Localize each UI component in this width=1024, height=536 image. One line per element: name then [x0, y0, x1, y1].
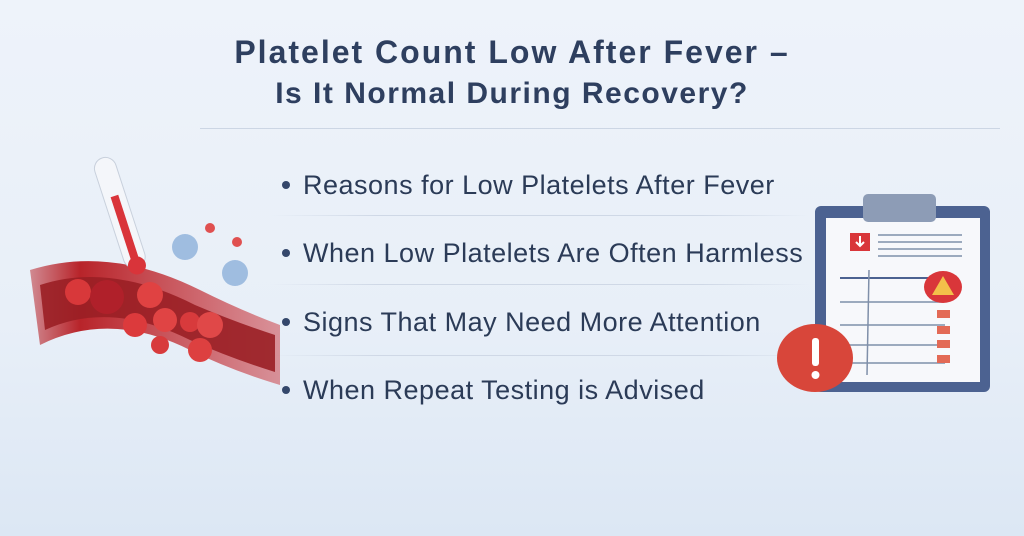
bullet 2: When Low Platelets Are Often Harmless: [303, 238, 803, 268]
bullet 4: When Repeat Testing is Advised: [303, 375, 705, 405]
thermometer: [92, 155, 150, 277]
alert circle: [777, 324, 853, 392]
bullet list: [282, 170, 803, 405]
clipboard icon: [777, 194, 990, 392]
bullet 1: Reasons for Low Platelets After Fever: [303, 170, 775, 200]
title: Platelet Count Low After Fever –: [234, 34, 790, 70]
illustration: blood vessel and thermometer: [30, 157, 280, 385]
title: [234, 34, 790, 110]
title: Is It Normal During Recovery?: [275, 77, 749, 110]
vessel: [30, 261, 280, 385]
bullet 3: Signs That May Need More Attention: [303, 307, 761, 337]
virus particles: [172, 223, 248, 286]
warning icon: [924, 271, 962, 303]
down-arrow icon: [850, 233, 870, 251]
